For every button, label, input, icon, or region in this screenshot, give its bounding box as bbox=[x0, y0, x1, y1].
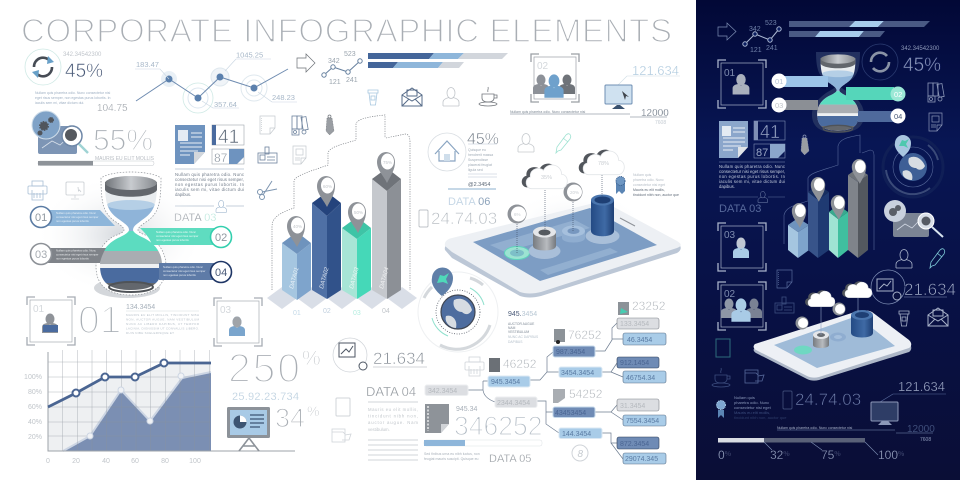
step 01 bbox=[30, 206, 115, 228]
dark: frame 02 team: 02 bbox=[724, 289, 736, 300]
isometric bar chart bbox=[267, 115, 417, 317]
isometric bar chart: DATA01 bbox=[289, 267, 301, 290]
striped header bars bbox=[368, 53, 508, 68]
line and area chart: 60% bbox=[28, 404, 42, 411]
isometric bar chart: 03 bbox=[353, 310, 361, 317]
dark: 21.634: 21.634 bbox=[904, 280, 956, 299]
line and area chart: 20% bbox=[28, 434, 42, 441]
stat: 250%: 25.92.23.734 bbox=[232, 391, 299, 403]
dark: ribbon text: consectetur nisi eget bbox=[734, 405, 772, 410]
dark: icon cluster bbox=[712, 270, 948, 387]
text block: 945.3454: DAPIBUS bbox=[508, 340, 523, 344]
DATA 05 block: 346252: DATA 05 bbox=[489, 453, 531, 465]
dark: 121.634 monitor: 12000 bbox=[907, 424, 935, 435]
text block: 945.3454 bbox=[508, 311, 539, 344]
dark: striped bars bbox=[789, 21, 930, 37]
stat: sync 45%: 45% bbox=[65, 61, 103, 82]
dark: icons right column bbox=[801, 83, 944, 155]
isometric bar chart: 40% bbox=[293, 224, 302, 229]
dark: resume card: Nullam quis pharetra odio. Nunc bbox=[719, 164, 785, 169]
tree connectors bbox=[468, 323, 623, 459]
line and area chart: 80% bbox=[28, 389, 42, 396]
dark: frame 03: 03 bbox=[724, 230, 736, 241]
dark panel background bbox=[696, 0, 960, 480]
dark: ribbon text: Nullam quis bbox=[734, 395, 755, 400]
tree value boxes: 3454.3454 bbox=[561, 370, 594, 377]
dark: ribbon text: Mauris eu elit mollis, bbox=[734, 410, 770, 415]
dark: sync 45%: 45% bbox=[903, 55, 941, 76]
text block: 945.3454: NUNC AC DAPIBUS bbox=[508, 335, 539, 339]
isometric bar chart: 75% bbox=[383, 160, 392, 165]
icon: circled 8 bbox=[572, 445, 588, 461]
dark: frame 03 bbox=[718, 223, 766, 271]
dark: hourglass steps: 01 bbox=[775, 77, 783, 86]
network diagram: 342 bbox=[328, 58, 340, 65]
step 03 bbox=[30, 244, 106, 264]
tree headers with doc icons bbox=[489, 299, 666, 403]
resume card with 41 and 87: 41 bbox=[218, 127, 239, 148]
network diagram bbox=[322, 51, 362, 86]
dark: progress bar with percents: 0 bbox=[718, 448, 725, 462]
stat: sync 45%: 104.75 bbox=[97, 103, 128, 114]
tree headers with doc icons: 46252 bbox=[503, 357, 537, 371]
text block: 134.3454 bbox=[126, 304, 200, 335]
dark: 121.634 monitor: 121.634 bbox=[898, 379, 945, 394]
step 02: consectetur nisi eget risus semper bbox=[156, 234, 199, 238]
frame: person 01: 01 bbox=[78, 299, 121, 342]
dark: resume card: non egestas purus lobortis. In bbox=[719, 174, 786, 179]
dark: ribbon text: pharetra odio. Nunc bbox=[734, 400, 769, 405]
tree value boxes: 342.3454 bbox=[428, 388, 457, 395]
icon grid middle bbox=[258, 115, 334, 200]
tree value boxes: 912.1454 bbox=[620, 360, 649, 367]
dark: ribbon text: tincidunt nibh non, auctor que bbox=[734, 415, 787, 420]
step 04 bbox=[159, 262, 232, 282]
dark: frame 01 bbox=[718, 60, 766, 108]
dark: resume card: 41 bbox=[760, 122, 780, 142]
resume card with 41 and 87: Nullam quis pharetra odio. Nunc bbox=[175, 172, 245, 177]
line and area chart: 40 bbox=[102, 458, 110, 465]
text block: 134.3454: DUIS NIBH SCELERISQUE ET bbox=[126, 331, 174, 335]
dark: resume card: 87 bbox=[756, 147, 768, 159]
network diagram: 241 bbox=[346, 77, 358, 84]
globe with orbit rings bbox=[418, 268, 498, 352]
tree value boxes: 7554.3454 bbox=[626, 418, 659, 425]
DATA 05 block: 346252: 346252 bbox=[454, 411, 542, 441]
DATA 04 block: tincidunt nibh non, bbox=[368, 414, 418, 418]
frame: person 03: 03 bbox=[220, 305, 232, 316]
step 01: Nullam quis pharetra odio. Nunc bbox=[56, 211, 97, 215]
DATA 05 block: 346252: 945.34 bbox=[456, 406, 478, 413]
tree value boxes bbox=[425, 318, 666, 464]
icon row top bbox=[368, 87, 497, 106]
stat: 121.634 with monitor: 7608 bbox=[655, 120, 666, 126]
icon: printer bbox=[465, 357, 484, 376]
hourglass bbox=[95, 176, 167, 292]
resume card with 41 and 87: 87 bbox=[214, 151, 228, 165]
resume card with 41 and 87: DATA 03 bbox=[174, 212, 216, 224]
dark: network diagram: 241 bbox=[766, 45, 778, 52]
isometric bar chart: DATA04 bbox=[379, 266, 391, 290]
stat: sync 45% bbox=[25, 49, 128, 114]
dark: network diagram: 342 bbox=[749, 26, 761, 33]
tree value boxes: 2344.3454 bbox=[497, 400, 530, 407]
tree value boxes: 46.3454 bbox=[627, 337, 652, 344]
icon block: home with 45% bbox=[428, 131, 499, 208]
ribbon with text: Mauris eu elit mollis, bbox=[633, 188, 665, 192]
icon block: home with 45%: placerat feugiat bbox=[468, 163, 492, 167]
dark: resume card bbox=[719, 121, 786, 215]
presentation board with 34%: % bbox=[307, 403, 319, 419]
dark: tablet bbox=[754, 281, 911, 381]
line and area chart: 100 bbox=[189, 458, 201, 465]
dark: network diagram: 523 bbox=[765, 20, 777, 27]
dark: progress bar with percents: % bbox=[898, 451, 904, 458]
text block: 945.3454: VESTIBULUM bbox=[508, 330, 529, 334]
icons: printer and monitor bbox=[28, 181, 84, 200]
line and area chart: 40% bbox=[28, 419, 42, 426]
dark: resume card: dapibus. bbox=[719, 184, 735, 189]
dark: hourglass halo bbox=[812, 52, 864, 133]
DATA 04 block: vestibulum. bbox=[368, 427, 390, 432]
icon block: home with 45%: 45% bbox=[467, 131, 499, 148]
stat: sync 45%: Nullam quis pharetra odio. Nunc consectetur nisi bbox=[35, 91, 111, 95]
dark: hourglass steps: 02 bbox=[894, 90, 902, 99]
dark: resume card: iaculis sem mi, vitae dictum dui bbox=[719, 179, 785, 184]
dark: hourglass steps: 03 bbox=[775, 101, 783, 110]
line chart with callouts bbox=[135, 50, 297, 113]
dark: 121.634 monitor: Nullam quis pharetra odio. Nunc consectetur nisi bbox=[777, 426, 853, 430]
dark: frame 02 team bbox=[718, 282, 766, 330]
stat: 121.634 with monitor: 121.634 bbox=[632, 63, 679, 78]
tree headers with doc icons: 23252 bbox=[632, 299, 666, 313]
line and area chart bbox=[24, 350, 295, 465]
line chart with callouts: 248.23 bbox=[272, 93, 295, 102]
dark: ribbon text bbox=[716, 395, 787, 420]
resume card with 41 and 87: consectetur nisi eget risus semper, bbox=[175, 177, 244, 182]
dark: arrow bbox=[718, 23, 736, 40]
stat: 55%: MAURIS EU ELIT MOLLIS bbox=[95, 156, 155, 162]
line chart with callouts: 183.47 bbox=[136, 60, 159, 69]
dark: hourglass bbox=[814, 54, 862, 132]
network diagram: 121 bbox=[329, 79, 341, 86]
dark: 121.634 monitor: 7608 bbox=[920, 437, 931, 443]
isometric bar chart: 50% bbox=[354, 210, 363, 215]
ribbon with text: tincidunt nibh non, auctor que bbox=[633, 193, 679, 197]
isometric bar chart: 04 bbox=[382, 308, 390, 315]
isometric bar chart: 01 bbox=[293, 310, 301, 317]
icon: outline arrow bbox=[297, 54, 315, 72]
dark: progress bar with percents: 100 bbox=[878, 448, 898, 462]
resume card with 41 and 87: iaculis sem mi, vitae dictum dui bbox=[175, 187, 244, 192]
dark: sync 45% bbox=[862, 44, 941, 80]
dark: progress bar with percents bbox=[718, 438, 904, 462]
resume card with 41 and 87: dapibus. bbox=[175, 192, 191, 197]
stat: phone 24.74.03: 24.74.03 bbox=[431, 209, 497, 228]
DATA 05 block: 346252 bbox=[424, 404, 542, 465]
frame: person 01: 01 bbox=[33, 304, 45, 315]
stat: 250%: % bbox=[302, 347, 321, 370]
icon: gears and magnifier bbox=[32, 111, 88, 154]
icons: person and pen bbox=[518, 134, 571, 153]
icon block: home with 45%: Suspendisse bbox=[468, 158, 488, 162]
ribbon with text: consectetur nisi eget bbox=[633, 183, 665, 187]
line chart with callouts: 357.64 bbox=[214, 100, 237, 109]
dark: 21.634 bbox=[871, 270, 956, 304]
isometric bar chart: 02 bbox=[323, 308, 331, 315]
step 03: non egestas purus lobortis bbox=[56, 256, 89, 260]
step 02: 02 bbox=[215, 232, 227, 244]
frame: team 02: 02 bbox=[537, 61, 549, 72]
stat: 250% bbox=[228, 345, 321, 403]
stat: 55%: 55% bbox=[93, 124, 153, 157]
text block: 945.3454: 945.3454 bbox=[508, 311, 537, 318]
tree value boxes: 945.3454 bbox=[491, 379, 520, 386]
tree value boxes: 872.3454 bbox=[620, 441, 649, 448]
step 04: 04 bbox=[215, 267, 227, 279]
dark: network diagram: 121 bbox=[750, 47, 762, 54]
line and area chart: 60 bbox=[131, 458, 139, 465]
line and area chart: 80 bbox=[161, 458, 169, 465]
isometric bar chart: DATA02 bbox=[319, 266, 331, 290]
step 01: non egestas purus lobortis bbox=[56, 219, 89, 223]
isometric bar chart: DATA03 bbox=[349, 266, 361, 290]
DATA 05 block: 346252: feugiat mauris suscipit. Quisque eu bbox=[424, 457, 479, 461]
step 04: consectetur nisi eget risus semper bbox=[163, 269, 206, 273]
tree value boxes: 987.3454 bbox=[556, 349, 585, 356]
hourglass dotted outline bbox=[96, 172, 166, 295]
dark: progress bar with percents: % bbox=[834, 451, 841, 458]
hourglass base shadow bbox=[94, 278, 160, 298]
dark: globe bbox=[883, 135, 943, 197]
step 04: Nullam quis pharetra odio. Nunc bbox=[163, 265, 204, 269]
icons: tablet and folder bbox=[332, 398, 351, 442]
tree value boxes: 31.3454 bbox=[620, 403, 645, 410]
dark: network diagram bbox=[743, 20, 781, 54]
icon block: home with 45%: @2.3454 bbox=[468, 182, 490, 188]
stat: 55% bbox=[38, 124, 155, 166]
tablet with cylinders: 78% bbox=[598, 161, 609, 167]
dark: resume card: consectetur nisi eget risus semper, bbox=[719, 169, 785, 174]
step 04: non egestas purus lobortis bbox=[163, 273, 196, 277]
resume card with 41 and 87 bbox=[174, 125, 245, 224]
text block: 945.3454: AUCTOR AUGUE bbox=[508, 322, 535, 326]
dark: frame 01: 01 bbox=[724, 68, 736, 79]
tree value boxes: 46754.34 bbox=[626, 375, 655, 382]
ribbon with text: pharetra odio. Nunc bbox=[633, 178, 664, 182]
tree value boxes: 29074.345 bbox=[625, 456, 658, 463]
icon block: home with 45%: hendrerit massa bbox=[468, 153, 493, 157]
text block: 945.3454: NAM bbox=[508, 326, 516, 330]
dark: hourglass steps bbox=[772, 74, 906, 124]
line and area chart: 20 bbox=[72, 458, 80, 465]
stat: sync 45%: iaculis sem mi, vitae dictum dui. bbox=[35, 101, 84, 105]
tablet with cylinders: 6% bbox=[514, 212, 521, 217]
tree headers with doc icons: 54252 bbox=[569, 387, 603, 401]
tree headers with doc icons: 76252 bbox=[568, 328, 602, 342]
stat: 21.634 with chart icon: 21.634 bbox=[373, 349, 425, 368]
frame: team 02 bbox=[531, 54, 579, 102]
dark: gears and magnifier bbox=[884, 200, 943, 237]
tablet with cylinders: 20% bbox=[570, 190, 579, 195]
step 02 bbox=[140, 226, 232, 248]
dark: progress bar with percents: 75 bbox=[821, 448, 834, 462]
step 01: 01 bbox=[35, 212, 47, 224]
dark: 121.634 monitor bbox=[777, 379, 946, 443]
hourglass soft shadow bbox=[35, 175, 205, 295]
icon block: home with 45%: ligula sed bbox=[468, 168, 483, 172]
tablet with cylinders bbox=[445, 150, 681, 298]
step 01: consectetur nisi eget risus semper bbox=[56, 215, 99, 219]
DATA 04 block: auctor augue. Nam bbox=[368, 420, 418, 425]
DATA 04 block: Mauris eu elit mollis, bbox=[368, 407, 418, 412]
icon block: home with 45%: Quisque eu bbox=[468, 148, 486, 152]
dark: person and pen icons bbox=[896, 249, 945, 268]
step 03: Nullam quis pharetra odio. Nunc bbox=[56, 248, 97, 252]
text block: 134.3454: MAURIS EU ELIT MOLLIS, TINCIDUNT NIBH bbox=[126, 313, 199, 317]
dark: 24.74.03: 24.74.03 bbox=[795, 390, 861, 409]
tree value boxes: 144.3454 bbox=[562, 431, 591, 438]
dark: isometric bars bbox=[784, 135, 874, 258]
tree value boxes: 43453454 bbox=[555, 410, 586, 417]
text block: 134.3454: NUNC AC LIBERO DAPIBUS, UT TEMPOR bbox=[126, 322, 200, 326]
stat: 121.634 with monitor: 12000 bbox=[641, 108, 669, 119]
ribbon with text: Nullam quis bbox=[633, 173, 652, 177]
text block: 134.3454: 134.3454 bbox=[126, 304, 155, 311]
DATA 04 block bbox=[366, 384, 418, 460]
icon block: home with 45%: DATA 06 bbox=[448, 196, 490, 208]
step 03: consectetur nisi eget risus semper bbox=[56, 252, 99, 256]
tablet with cylinders: 35% bbox=[541, 175, 552, 181]
ribbon with text bbox=[616, 173, 679, 197]
network diagram: 523 bbox=[344, 51, 356, 58]
text block: 134.3454: LACINIA, DIGNISSIM UT CONVALLIS LIBERO. bbox=[126, 326, 199, 330]
isometric bar chart: 60% bbox=[323, 184, 332, 189]
step 02: Nullam quis pharetra odio. Nunc bbox=[156, 230, 197, 234]
stat: 21.634 with chart icon bbox=[333, 338, 427, 372]
frame: person 01 bbox=[27, 297, 121, 345]
dark: progress bar with percents: % bbox=[783, 451, 790, 458]
stat: 121.634 with monitor: Nullam quis pharetra odio. Nunc consectetur nisi bbox=[510, 110, 586, 114]
title: CORPORATE INFOGRAPHIC ELEMENTS bbox=[21, 12, 672, 49]
dark: resume card: DATA 03 bbox=[719, 203, 761, 215]
text block: 134.3454: NON, AUCTOR AUGUE. NAM VESTIBULUM bbox=[126, 318, 200, 322]
stat: 121.634 with monitor bbox=[510, 63, 680, 126]
DATA 05 block: 346252: Sed finibus urna eu nibh luctus, non bbox=[424, 452, 480, 456]
line and area chart: 100% bbox=[24, 374, 42, 381]
step 02: non egestas purus lobortis bbox=[156, 238, 189, 242]
dark: sync 45%: 342.34542300 bbox=[901, 46, 940, 52]
dark: progress bar with percents: % bbox=[725, 451, 731, 458]
icon: circled 8: 8 bbox=[578, 449, 584, 460]
frame: person 03 bbox=[214, 298, 262, 346]
tree value boxes: 133.3454 bbox=[620, 321, 649, 328]
stat: sync 45%: 342.34542300 bbox=[63, 52, 102, 58]
step 03: 03 bbox=[35, 249, 47, 261]
dark: progress bar with percents: 32 bbox=[770, 448, 783, 462]
stat: sync 45%: eget risus semper, non egestas purus lobortis. In bbox=[35, 96, 111, 100]
stat: 250%: 250 bbox=[228, 345, 300, 391]
DATA 04 block: DATA 04 bbox=[366, 384, 416, 399]
presentation board with 34%: 34 bbox=[275, 403, 305, 433]
resume card with 41 and 87: non egestas purus lobortis. In bbox=[175, 182, 245, 187]
presentation board with 34% bbox=[227, 403, 319, 451]
dark: hourglass steps: 04 bbox=[894, 112, 902, 121]
line chart with callouts: 1045.25 bbox=[236, 50, 263, 60]
line and area chart: 0 bbox=[46, 458, 50, 465]
